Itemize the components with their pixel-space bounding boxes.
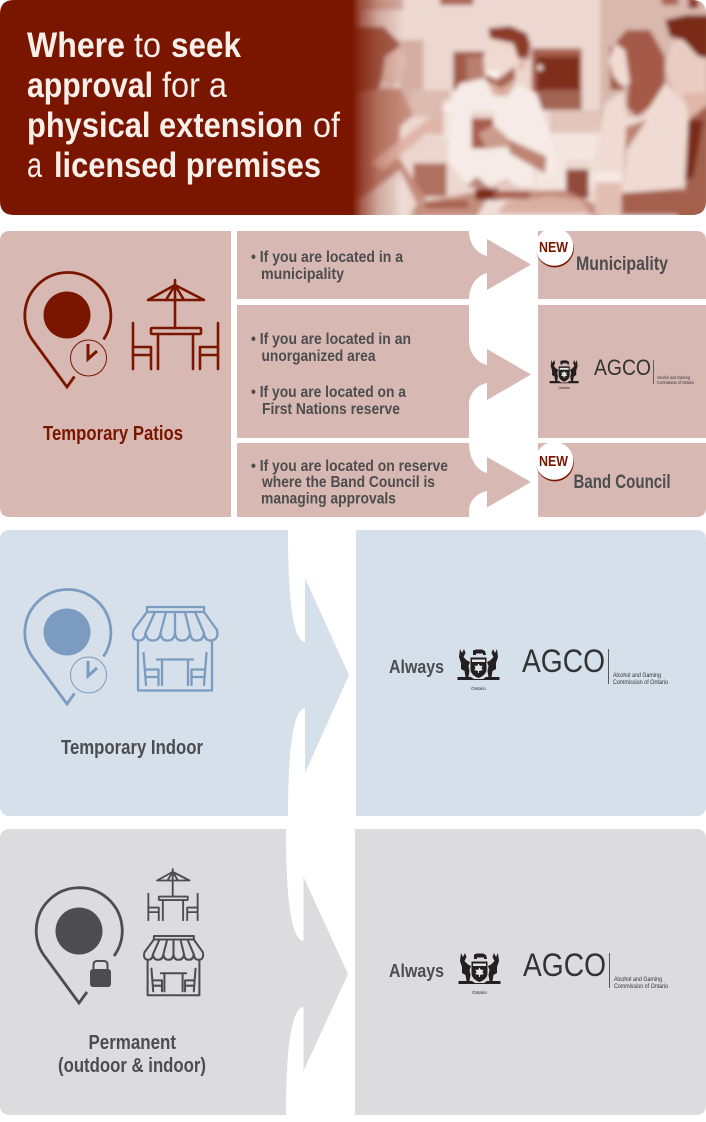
destination: municipality bbox=[535, 228, 706, 299]
icon: storefront with table bbox=[144, 936, 203, 995]
label: temporary indoor: Temporary Indoor bbox=[61, 737, 203, 759]
icon: patio table with umbrella bbox=[148, 869, 198, 920]
destination: AGCO: Ontario bbox=[558, 386, 570, 390]
icon: location pin with clock bbox=[25, 272, 111, 387]
destination: AGCO bbox=[538, 305, 706, 438]
arrow row: unorganized area or reserve: • If you are located in an bbox=[251, 331, 411, 348]
icon: location pin with clock bbox=[25, 589, 111, 704]
panel: temporary patios bbox=[0, 228, 706, 517]
destination: band council bbox=[535, 442, 706, 517]
destination: always AGCO: Ontario bbox=[472, 990, 487, 995]
destination: always AGCO bbox=[355, 829, 706, 1115]
destination: AGCO: Commission of Ontario bbox=[657, 380, 695, 385]
arrow row: band council reserve bbox=[237, 443, 531, 517]
destination: always AGCO bbox=[356, 530, 706, 816]
icon: location pin with lock bbox=[36, 888, 122, 1003]
destination: municipality: NEW bbox=[539, 239, 569, 256]
arrow row: unorganized area or reserve: • If you are located on a bbox=[251, 384, 406, 401]
arrow row: unorganized area or reserve: unorganized area bbox=[262, 348, 376, 365]
arrow row: municipality: municipality bbox=[261, 266, 344, 283]
arrow row: band council reserve: managing approvals bbox=[261, 490, 396, 508]
category card with arrow bbox=[0, 530, 349, 816]
destination: always AGCO: Ontario bbox=[471, 686, 486, 691]
destination: always AGCO: AGCO bbox=[522, 643, 605, 679]
destination: band council: Band Council bbox=[574, 471, 670, 493]
destination: always AGCO: Commission of Ontario bbox=[614, 984, 669, 990]
icon: patio table with umbrella bbox=[133, 280, 218, 369]
title: a bbox=[27, 146, 42, 185]
destination: always AGCO: AGCO bbox=[523, 947, 606, 983]
destination: always AGCO: Always bbox=[389, 960, 444, 981]
arrow row: municipality bbox=[237, 231, 531, 299]
title: physical extension bbox=[27, 106, 303, 145]
arrow row: unorganized area or reserve bbox=[237, 305, 531, 438]
photo: friends toasting on a patio bbox=[0, 0, 706, 227]
destination: always AGCO: Alcohol and Gaming bbox=[613, 673, 661, 679]
category card with arrow bbox=[0, 829, 348, 1115]
arrow row: band council reserve: • If you are located on reserve bbox=[251, 458, 448, 475]
destination: always AGCO: Always bbox=[389, 656, 444, 677]
title: seek bbox=[171, 26, 241, 65]
label: permanent outdoor and indoor: (outdoor & indoor) bbox=[58, 1055, 206, 1077]
arrow row: band council reserve: where the Band Council is bbox=[261, 474, 435, 491]
title: of bbox=[313, 106, 340, 145]
destination: AGCO: Alcohol and Gaming bbox=[657, 375, 691, 380]
label: temporary patios: Temporary Patios bbox=[43, 423, 183, 445]
panel: permanent bbox=[0, 829, 706, 1115]
title: Where bbox=[27, 26, 125, 65]
title bbox=[27, 26, 340, 185]
label: permanent outdoor and indoor: Permanent bbox=[88, 1032, 176, 1054]
panel: temporary indoor bbox=[0, 530, 706, 816]
destination: AGCO: AGCO bbox=[594, 355, 651, 380]
destination: band council: NEW bbox=[539, 453, 569, 470]
category card bbox=[0, 231, 231, 517]
title: licensed premises bbox=[54, 146, 321, 185]
destination: municipality: Municipality bbox=[576, 253, 668, 275]
title: approval bbox=[27, 66, 153, 105]
arrow row: unorganized area or reserve: First Nations reserve bbox=[262, 401, 400, 418]
icon: storefront with table bbox=[133, 607, 217, 690]
destination: always AGCO: Commission of Ontario bbox=[613, 680, 669, 686]
header banner bbox=[0, 0, 706, 227]
title: for a bbox=[162, 66, 227, 105]
destination: always AGCO: Alcohol and Gaming bbox=[614, 977, 662, 983]
arrow row: municipality: • If you are located in a bbox=[251, 249, 403, 266]
label: permanent outdoor and indoor bbox=[58, 1032, 206, 1077]
title: to bbox=[134, 26, 161, 65]
